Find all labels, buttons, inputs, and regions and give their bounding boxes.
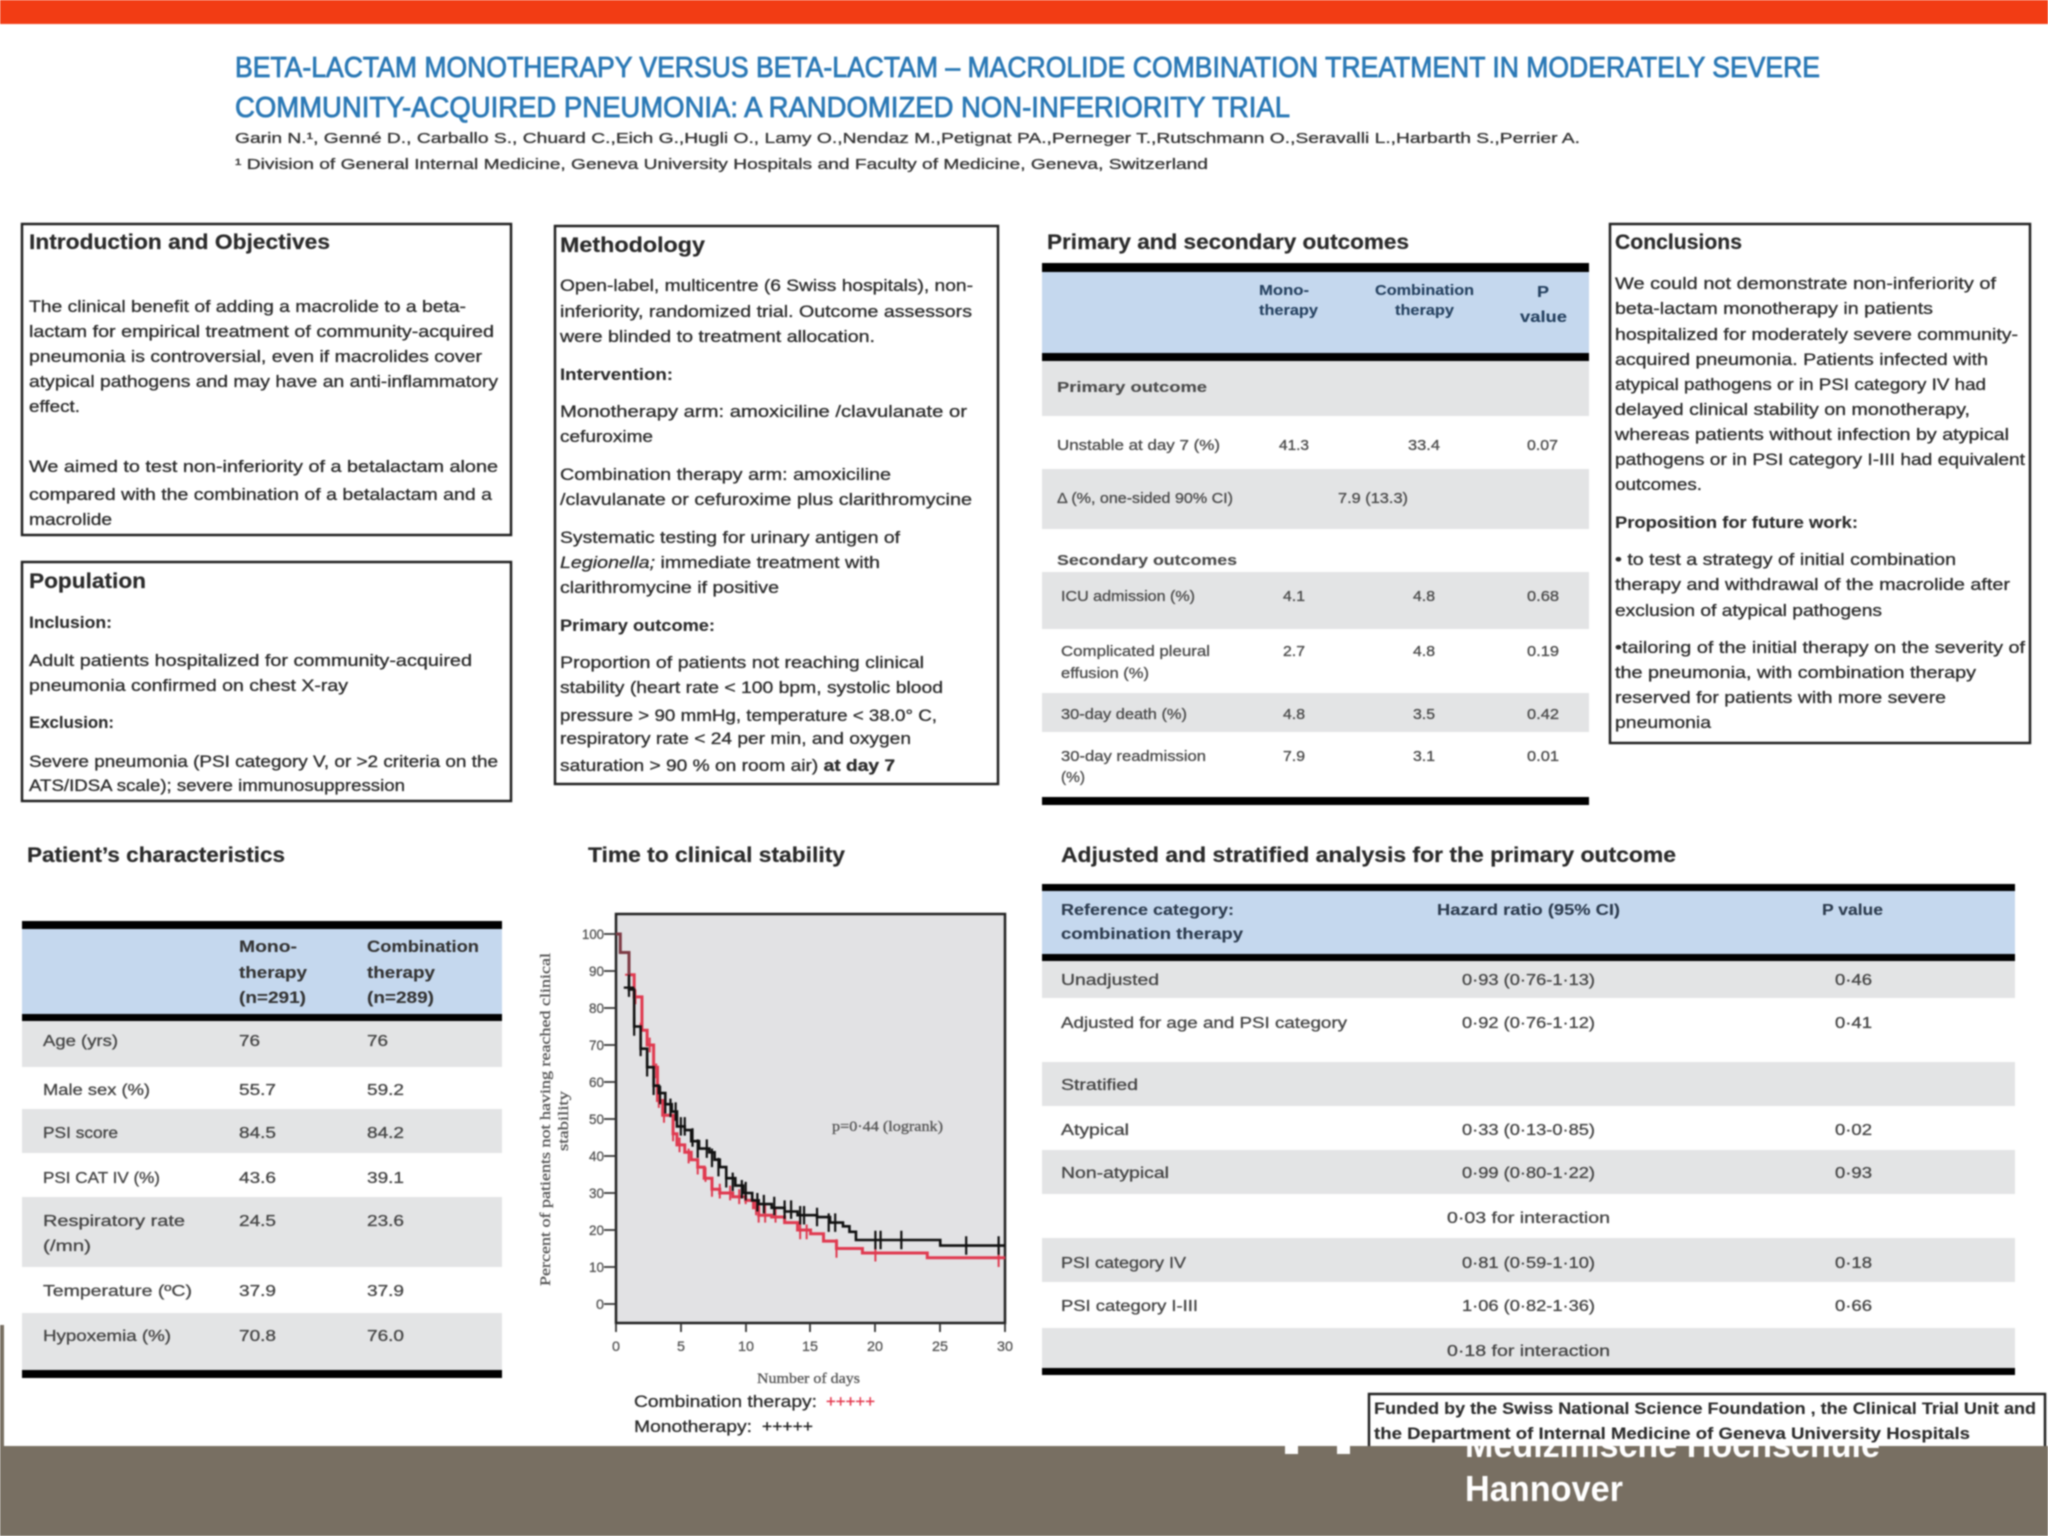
table: outcomes: 7.9 xyxy=(1283,748,1305,765)
text block: future work: pneumonia xyxy=(1615,713,1712,732)
heading: conclusions: Conclusions xyxy=(1615,231,1742,254)
chart: Kaplan-Meier curves xyxy=(538,914,1013,1387)
table: hazard ratios: 0·41 xyxy=(1835,1015,1872,1032)
table: outcomes: effusion (%) xyxy=(1061,665,1149,682)
text: institution name: Hannover xyxy=(1465,1468,1623,1509)
y axis tick labels: 20 xyxy=(589,1222,604,1238)
table: outcomes: therapy xyxy=(1259,302,1319,319)
y axis title xyxy=(538,953,572,1286)
text block: intervention: Intervention: xyxy=(560,365,673,384)
table: hazard ratios: 0·93 xyxy=(1835,1165,1872,1182)
callout: funding note: the Department of Internal Medicine of Geneva University Hospitals xyxy=(1374,1424,1970,1443)
text block: intervention: cefuroxime xyxy=(560,427,653,446)
text block: design xyxy=(559,276,973,346)
table: hazard ratios: Reference category: xyxy=(1061,902,1234,919)
panel: primary and secondary outcomes xyxy=(1042,231,1589,805)
title xyxy=(235,52,1820,124)
y axis title: Percent of patients not having reached clinical xyxy=(538,953,554,1286)
text block: inclusion: pneumonia confirmed on chest X-ray xyxy=(29,676,349,695)
text block: intervention: Systematic testing for urinary antigen of xyxy=(560,528,900,547)
table: outcomes: ICU admission (%) xyxy=(1061,588,1195,605)
text block: conclusion: atypical pathogens or in PSI category IV had xyxy=(1615,375,1986,394)
table: characteristics: 39.1 xyxy=(367,1170,404,1187)
table: hazard ratios: 0·81 (0·59-1·10) xyxy=(1462,1255,1595,1272)
panel: patient's characteristics xyxy=(22,844,502,1378)
table: characteristics: Combination xyxy=(367,937,479,956)
table: outcomes: 41.3 xyxy=(1279,437,1309,454)
table: outcomes: 4.8 xyxy=(1413,588,1435,605)
text block: background: effect. xyxy=(29,397,80,416)
table: hazard ratios: 0·92 (0·76-1·12) xyxy=(1462,1015,1595,1032)
text block: background: The clinical benefit of adding a macrolide to a beta- xyxy=(29,297,466,316)
table: characteristics: 24.5 xyxy=(239,1213,276,1230)
table: outcomes: 3.5 xyxy=(1413,706,1435,723)
affiliation: ¹ Division of General Internal Medicine, Geneva University Hospitals and Faculty of Medicine, Geneva, Switzerland xyxy=(235,156,1208,173)
y axis tick labels: 50 xyxy=(589,1111,604,1127)
table: characteristics: 84.5 xyxy=(239,1125,276,1142)
text block: intervention: /clavulanate or cefuroxime plus clarithromycine xyxy=(560,490,972,509)
x axis tick labels: 15 xyxy=(802,1338,818,1354)
panel: adjusted and stratified analysis xyxy=(1042,844,2015,1375)
text: institution name xyxy=(1465,1424,1880,1509)
x axis tick labels xyxy=(612,1338,1013,1354)
table: outcomes xyxy=(1042,263,1589,805)
text block: background: pneumonia is controversial, even if macrolides cover xyxy=(29,347,482,366)
curve: combination therapy xyxy=(625,967,1005,1267)
text block: intervention: Combination therapy arm: amoxiciline xyxy=(560,465,891,484)
y axis tick labels: 30 xyxy=(589,1185,604,1201)
text block: aim: We aimed to test non-inferiority of a betalactam alone xyxy=(29,457,498,476)
text block: future work: Proposition for future work: xyxy=(1615,513,1858,532)
icon: logo fragments xyxy=(1285,1446,1350,1454)
text block: future work: exclusion of atypical pathogens xyxy=(1615,601,1882,620)
table: outcomes: 4.8 xyxy=(1283,706,1305,723)
table: outcomes: Primary outcome xyxy=(1057,379,1207,396)
table: hazard ratios: 0·99 (0·80-1·22) xyxy=(1462,1165,1595,1182)
table: hazard ratios: 0·46 xyxy=(1835,972,1872,989)
table: outcomes: 7.9 (13.3) xyxy=(1338,490,1408,507)
legend: Monotherapy: xyxy=(634,1417,752,1436)
table: hazard ratios: Non-atypical xyxy=(1061,1165,1169,1182)
text block: primary outcome: stability (heart rate < 100 bpm, systolic blood xyxy=(560,678,943,697)
authors: Garin N.¹, Genné D., Carballo S., Chuard C.,Eich G.,Hugli O., Lamy O.,Nendaz M.,Petignat PA.,Perneger T.,Rutschmann O.,Seravalli L.,Harbarth S.,Perrier A. xyxy=(235,130,1580,147)
y axis tick labels: 60 xyxy=(589,1074,604,1090)
table: hazard ratios: 0·33 (0·13-0·85) xyxy=(1462,1122,1595,1139)
table: characteristics: (n=289) xyxy=(367,988,434,1007)
panel: methodology xyxy=(555,226,998,784)
panel: population xyxy=(22,562,511,801)
text block: exclusion: Severe pneumonia (PSI category V, or >2 criteria on the xyxy=(29,752,498,771)
table: outcomes: Unstable at day 7 (%) xyxy=(1057,437,1220,454)
panel: introduction and objectives xyxy=(22,224,511,535)
table: outcomes: 0.01 xyxy=(1527,748,1559,765)
x axis tick labels: 30 xyxy=(997,1338,1013,1354)
text block: exclusion: ATS/IDSA scale); severe immunosuppression xyxy=(29,776,405,795)
heading: outcomes: Primary and secondary outcomes xyxy=(1047,231,1409,254)
heading: methodology: Methodology xyxy=(560,234,705,257)
y axis tick labels: 40 xyxy=(589,1148,604,1164)
table: outcomes: 33.4 xyxy=(1408,437,1440,454)
table: outcomes: therapy xyxy=(1395,302,1455,319)
heading: introduction: Introduction and Objectives xyxy=(29,231,330,254)
table: characteristics: 55.7 xyxy=(239,1082,276,1099)
text block: background xyxy=(29,297,499,416)
table: characteristics: 59.2 xyxy=(367,1082,404,1099)
table: hazard ratios: PSI category IV xyxy=(1061,1255,1186,1272)
text block: conclusion xyxy=(1614,274,2025,494)
table: characteristics: Respiratory rate xyxy=(43,1213,185,1230)
table: characteristics: 23.6 xyxy=(367,1213,404,1230)
table: hazard ratios: 1·06 (0·82-1·36) xyxy=(1462,1298,1595,1315)
callout: funding note: Funded by the Swiss National Science Foundation , the Clinical Trial Unit and xyxy=(1374,1399,2036,1418)
table: hazard ratios: Hazard ratio (95% CI) xyxy=(1437,902,1620,919)
text block: background: atypical pathogens and may have an anti-inflammatory xyxy=(29,372,499,391)
table: hazard ratios: 0·18 for interaction xyxy=(1447,1343,1610,1360)
legend: +++++ xyxy=(762,1417,813,1436)
text block: conclusion: beta-lactam monotherapy in patients xyxy=(1615,299,1933,318)
heading: time to clinical stability: Time to clinical stability xyxy=(588,844,845,867)
text block: design: were blinded to treatment allocation. xyxy=(559,327,875,346)
y axis tick labels: 90 xyxy=(589,963,604,979)
table: characteristics: (n=291) xyxy=(239,988,306,1007)
table: hazard ratios: Atypical xyxy=(1061,1122,1129,1139)
table: hazard ratios: 0·93 (0·76-1·13) xyxy=(1462,972,1595,989)
text block: future work: reserved for patients with more severe xyxy=(1615,688,1946,707)
text block: primary outcome: pressure > 90 mmHg, temperature < 38.0° C, xyxy=(560,706,937,725)
table: characteristics: 76 xyxy=(367,1033,388,1050)
text block: future work: •tailoring of the initial therapy on the severity of xyxy=(1615,638,2025,657)
text block: primary outcome: Proportion of patients not reaching clinical xyxy=(560,653,924,672)
legend: +++++ xyxy=(826,1392,875,1411)
table: outcomes: 4.1 xyxy=(1283,588,1305,605)
table: characteristics: 76 xyxy=(239,1033,260,1050)
title: COMMUNITY-ACQUIRED PNEUMONIA: A RANDOMIZED NON-INFERIORITY TRIAL xyxy=(235,92,1290,124)
footer band xyxy=(0,1424,2048,1536)
panel: conclusions xyxy=(1610,224,2030,743)
x axis tick labels: 20 xyxy=(867,1338,883,1354)
text block: design: inferiority, randomized trial. Outcome assessors xyxy=(560,302,972,321)
table: outcomes: Mono- xyxy=(1259,282,1309,299)
text block: design: Open-label, multicentre (6 Swiss hospitals), non- xyxy=(560,276,973,295)
text block: intervention: Monotherapy arm: amoxiciline /clavulanate or xyxy=(560,402,967,421)
y axis tick labels: 80 xyxy=(589,1000,604,1016)
y axis tick labels: 100 xyxy=(582,926,604,942)
y axis tick labels: 70 xyxy=(589,1037,604,1053)
text block: background: lactam for empirical treatment of community-acquired xyxy=(29,322,494,341)
curve: monotherapy xyxy=(624,952,1005,1255)
text block: conclusion: delayed clinical stability on monotherapy, xyxy=(1615,400,1970,419)
table: hazard ratios: combination therapy xyxy=(1061,926,1243,943)
y axis tick labels: 0 xyxy=(596,1296,604,1312)
text block: inclusion: Adult patients hospitalized for community-acquired xyxy=(29,651,472,670)
text block: intervention: clarithromycine if positive xyxy=(560,578,779,597)
text block: aim xyxy=(29,457,498,529)
text block: inclusion xyxy=(29,613,472,695)
text block: primary outcome: Primary outcome: xyxy=(560,616,715,635)
text block: exclusion xyxy=(29,713,498,795)
table: outcomes: 0.42 xyxy=(1527,706,1559,723)
table: hazard ratios: Unadjusted xyxy=(1061,972,1159,989)
table: outcomes: 30-day readmission xyxy=(1061,748,1206,765)
table: outcomes: P xyxy=(1537,284,1549,301)
table: characteristics: Temperature (ºC) xyxy=(43,1283,192,1300)
annotation: p value: p=0·44 (logrank) xyxy=(832,1119,943,1135)
text block: primary outcome xyxy=(560,616,943,775)
y axis tick labels: 10 xyxy=(589,1259,604,1275)
curve: shared start of both arms xyxy=(616,934,629,975)
table: outcomes: Δ (%, one-sided 90% CI) xyxy=(1057,490,1233,507)
table: characteristics: 43.6 xyxy=(239,1170,276,1187)
table: outcomes: 0.19 xyxy=(1527,643,1559,660)
text block: conclusion: We could not demonstrate non-inferiority of xyxy=(1615,274,1996,293)
table: outcomes: 30-day death (%) xyxy=(1061,706,1187,723)
table: outcomes: 4.8 xyxy=(1413,643,1435,660)
table: outcomes: value xyxy=(1520,309,1567,326)
text block: inclusion: Inclusion: xyxy=(29,613,112,632)
panel: time to clinical stability xyxy=(538,844,1013,1436)
table: characteristics: therapy xyxy=(239,963,308,982)
table: outcomes: (%) xyxy=(1061,769,1085,786)
y axis title: stability xyxy=(556,1090,572,1151)
table: characteristics: 84.2 xyxy=(367,1125,404,1142)
callout: funding note xyxy=(1369,1394,2045,1464)
table: characteristics: 37.9 xyxy=(367,1283,404,1300)
y axis tick labels xyxy=(582,926,604,1312)
x axis tick labels: 0 xyxy=(612,1338,620,1354)
table: outcomes: 2.7 xyxy=(1283,643,1305,660)
x axis tick labels: 10 xyxy=(738,1338,754,1354)
text block: future work: the pneumonia, with combination therapy xyxy=(1615,663,1977,682)
table: characteristics: Age (yrs) xyxy=(43,1033,118,1050)
table: characteristics: (/mn) xyxy=(43,1238,91,1255)
table: outcomes: 3.1 xyxy=(1413,748,1435,765)
table: hazard ratios xyxy=(1042,884,2015,1375)
table: characteristics: Male sex (%) xyxy=(43,1082,150,1099)
table: characteristics xyxy=(22,921,502,1378)
heading: patient's characteristics: Patient’s characteristics xyxy=(27,844,285,867)
table: hazard ratios: 0·02 xyxy=(1835,1122,1872,1139)
text block: exclusion: Exclusion: xyxy=(29,713,114,732)
left edge stripe xyxy=(0,1325,4,1536)
table: hazard ratios: 0·66 xyxy=(1835,1298,1872,1315)
title block xyxy=(235,52,1820,173)
legend: Combination therapy: xyxy=(634,1392,817,1411)
legend xyxy=(634,1392,875,1436)
table: characteristics: PSI score xyxy=(43,1125,118,1142)
table: outcomes: Combination xyxy=(1375,282,1474,299)
table: characteristics: therapy xyxy=(367,963,436,982)
text block: aim: compared with the combination of a betalactam and a xyxy=(29,485,493,504)
text block: future work: therapy and withdrawal of the macrolide after xyxy=(1615,575,2010,594)
text block: conclusion: outcomes. xyxy=(1615,475,1702,494)
table: outcomes: 0.07 xyxy=(1527,437,1558,454)
x axis tick labels: 25 xyxy=(932,1338,948,1354)
text block: conclusion: hospitalized for moderately severe community- xyxy=(1615,325,2018,344)
top accent bar xyxy=(0,0,2048,24)
text block: future work: • to test a strategy of initial combination xyxy=(1615,550,1956,569)
table: characteristics: 37.9 xyxy=(239,1283,276,1300)
heading: adjusted and stratified analysis: Adjusted and stratified analysis for the primary outcome xyxy=(1061,844,1676,867)
table: hazard ratios: P value xyxy=(1822,902,1883,919)
table: characteristics: 76.0 xyxy=(367,1328,404,1345)
table: hazard ratios: 0·03 for interaction xyxy=(1447,1210,1610,1227)
table: characteristics: PSI CAT IV (%) xyxy=(43,1170,160,1187)
table: outcomes: Complicated pleural xyxy=(1061,643,1210,660)
table: characteristics: Mono- xyxy=(239,937,297,956)
text block: intervention xyxy=(560,365,972,597)
text block: conclusion: pathogens or in PSI category I-III had equivalent xyxy=(1615,450,2025,469)
title: BETA-LACTAM MONOTHERAPY VERSUS BETA-LACTAM – MACROLIDE COMBINATION TREATMENT IN MODERATELY SEVERE xyxy=(235,52,1820,84)
text block: aim: macrolide xyxy=(29,510,112,529)
text block: intervention: Legionella; immediate treatment with xyxy=(560,553,880,572)
table: outcomes: 0.68 xyxy=(1527,588,1559,605)
table: characteristics: 70.8 xyxy=(239,1328,276,1345)
table: hazard ratios: PSI category I-III xyxy=(1061,1298,1198,1315)
heading: population: Population xyxy=(29,570,146,593)
text block: future work xyxy=(1615,513,2025,732)
table: hazard ratios: Stratified xyxy=(1061,1077,1138,1094)
text block: conclusion: acquired pneumonia. Patients infected with xyxy=(1615,350,1988,369)
table: hazard ratios: 0·18 xyxy=(1835,1255,1872,1272)
text block: primary outcome: respiratory rate < 24 per min, and oxygen xyxy=(560,729,911,748)
table: characteristics: Hypoxemia (%) xyxy=(43,1328,171,1345)
x axis tick labels: 5 xyxy=(677,1338,685,1354)
text block: primary outcome: saturation > 90 % on room air) at day 7 xyxy=(560,756,895,775)
text block: conclusion: whereas patients without infection by atypical xyxy=(1614,425,2009,444)
table: outcomes: Secondary outcomes xyxy=(1057,552,1237,569)
x axis title: Number of days xyxy=(757,1371,860,1387)
table: hazard ratios: Adjusted for age and PSI category xyxy=(1061,1015,1347,1032)
